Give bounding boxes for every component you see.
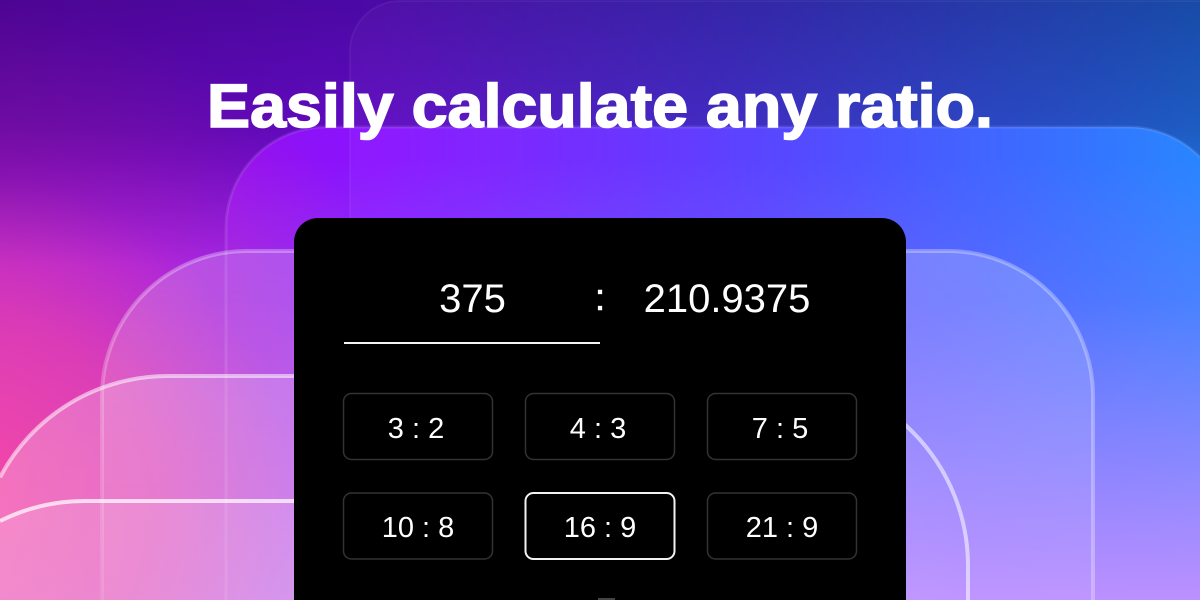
input underline <box>344 342 600 344</box>
button: 7:5 <box>708 394 856 460</box>
input: width value: 375 <box>439 277 506 321</box>
button: 4:3 <box>526 394 674 460</box>
button: 4:3: 4 : 3 <box>570 413 626 445</box>
shape: second layer <box>226 127 1200 600</box>
button: 21:9: 21 : 9 <box>746 512 818 544</box>
shape: front layer <box>0 501 800 600</box>
button: 10:8 <box>344 493 492 559</box>
shape: back layer <box>350 1 1200 600</box>
shape: middle layer <box>102 251 1093 600</box>
button: 3:2: 3 : 2 <box>388 413 444 445</box>
button: 21:9 <box>708 493 856 559</box>
card background <box>294 218 906 600</box>
button: 7:5: 7 : 5 <box>752 413 808 445</box>
cropped bottom control <box>598 598 615 600</box>
title: Easily calculate any ratio. <box>207 72 993 140</box>
button: 10:8: 10 : 8 <box>382 512 454 544</box>
input: height value: 210.9375 <box>644 277 810 321</box>
button: 16:9 selected: 16 : 9 <box>564 512 636 544</box>
top shading outside second layer <box>0 0 1200 265</box>
ratio colon: : <box>595 277 605 319</box>
button: 16:9 selected <box>526 493 674 559</box>
button: 3:2 <box>344 394 492 460</box>
shape: fourth layer <box>0 376 968 600</box>
panel: calculator card <box>294 218 906 600</box>
